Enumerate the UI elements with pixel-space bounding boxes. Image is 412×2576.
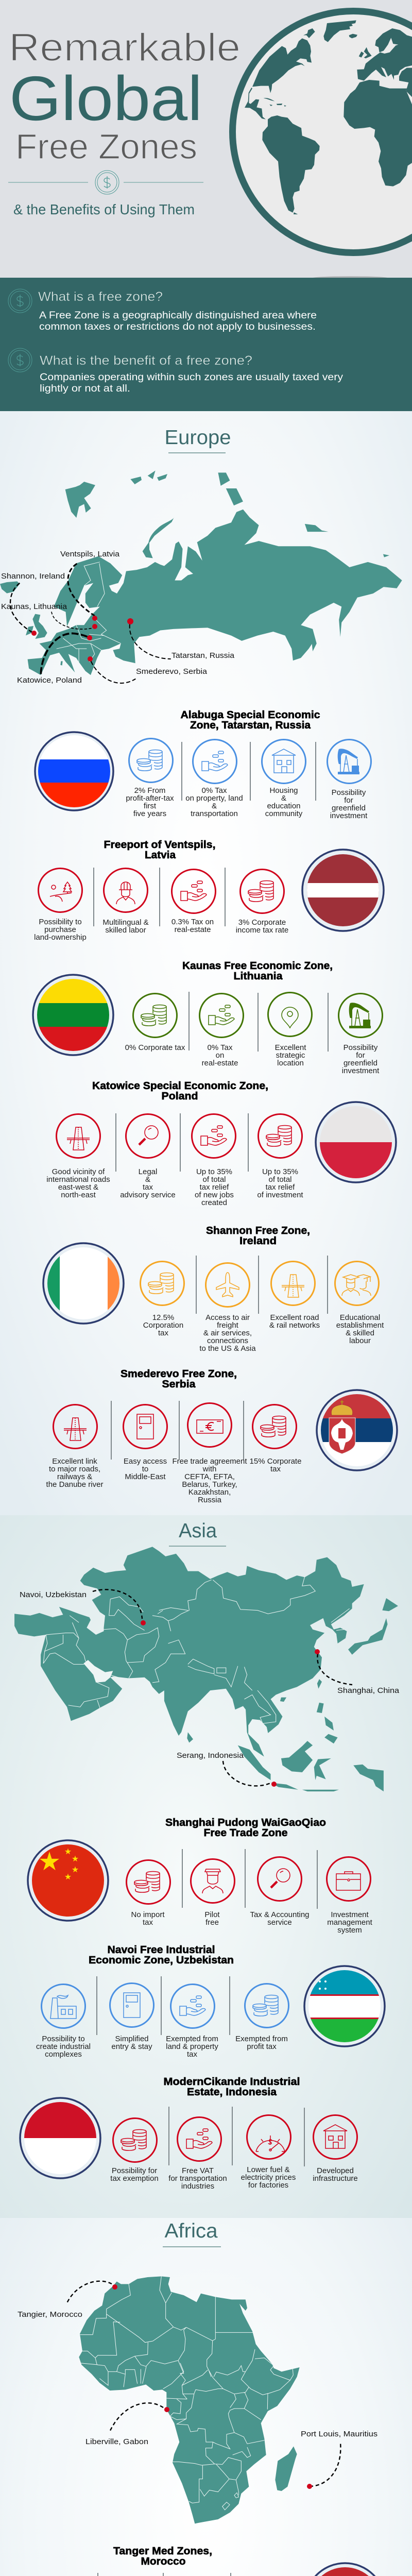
question two: What is the benefit of a free zone? bbox=[40, 353, 252, 368]
benefit: investment relief bbox=[257, 1114, 303, 1199]
benefit: greenfield: greenfield bbox=[344, 1059, 377, 1067]
benefit: tax exemption: Possibility for bbox=[112, 2166, 157, 2175]
answer two: Companies operating within such zones are usually taxed very bbox=[40, 371, 343, 383]
heading: Navoi Free Industrial bbox=[107, 1944, 215, 1956]
benefit: Middle-East access: Easy access bbox=[124, 1457, 167, 1466]
flag: Indonesia bbox=[20, 2098, 100, 2178]
heading: Shanghai Pudong WaiGaoQiao bbox=[165, 1817, 326, 1828]
heading bbox=[165, 1817, 326, 1839]
icon: dollar coin one bbox=[8, 289, 32, 313]
benefit: free VAT: industries bbox=[181, 2182, 214, 2191]
heading: Economic Zone, Uzbekistan bbox=[89, 1954, 234, 1966]
map markers bbox=[31, 616, 133, 662]
heading: Shannon Free Zone, bbox=[206, 1225, 310, 1236]
benefit: property tax: transportation bbox=[191, 809, 238, 818]
benefit: entry and stay: Simplified bbox=[115, 2035, 149, 2043]
zone: Shannon bbox=[43, 1225, 384, 1353]
map markers bbox=[112, 2284, 312, 2489]
benefit: infrastructure bbox=[313, 2115, 358, 2183]
benefit: infrastructure: Developed bbox=[317, 2166, 354, 2175]
benefit: trade agreements: with bbox=[202, 1465, 216, 1473]
flag: Russia bbox=[35, 732, 113, 810]
benefit: greenfield: Possibility bbox=[344, 1043, 377, 1052]
benefit: roads: north-east bbox=[61, 1191, 96, 1199]
benefit: corporate tax bbox=[236, 870, 288, 935]
benefit: transport link bbox=[46, 1404, 103, 1489]
map labels bbox=[1, 550, 235, 685]
benefit: corporate tax: income tax rate bbox=[236, 926, 288, 935]
benefit: investment relief: Up to 35% bbox=[262, 1167, 298, 1176]
panel: definitions bbox=[0, 278, 412, 411]
benefit: profit tax: first bbox=[144, 802, 157, 810]
heading: Estate, Indonesia bbox=[187, 2086, 277, 2098]
benefit: air freight: connections bbox=[207, 1336, 248, 1345]
benefit: Middle-East access: to bbox=[142, 1465, 148, 1473]
subtitle: & the Benefits of Using Them bbox=[13, 201, 195, 217]
benefit: profit tax bbox=[235, 1984, 288, 2051]
zone: Katowice bbox=[46, 1080, 396, 1207]
map labels: Ventspils, Latvia bbox=[60, 550, 120, 558]
benefit: air freight: Access to air bbox=[205, 1313, 250, 1322]
icon: dollar coin bbox=[95, 171, 119, 194]
benefit: corporate tax: tax bbox=[270, 1465, 281, 1473]
benefit: skilled labor: skilled labor bbox=[105, 926, 146, 935]
benefit: roads: east-west & bbox=[58, 1183, 98, 1192]
answer one: A Free Zone is a geographically distinguished area where bbox=[39, 310, 317, 321]
benefit: advisory: & bbox=[145, 1175, 150, 1184]
benefit: investment management: management bbox=[327, 1918, 373, 1927]
heading bbox=[89, 1944, 234, 1966]
benefit: housing: Housing bbox=[269, 786, 298, 795]
header panel bbox=[0, 0, 412, 280]
benefit: education bbox=[335, 1261, 384, 1345]
benefit: housing: community bbox=[265, 809, 303, 818]
benefit: housing: & bbox=[281, 794, 286, 803]
benefit: profit tax bbox=[126, 739, 174, 818]
benefit: jobs relief: of new jobs bbox=[195, 1191, 234, 1199]
map labels: Navoi, Uzbekistan bbox=[20, 1590, 87, 1599]
heading bbox=[180, 709, 320, 731]
benefit: air freight: to the US & Asia bbox=[199, 1344, 256, 1353]
benefit: Middle-East access bbox=[124, 1404, 167, 1481]
zone: Cikande bbox=[20, 2076, 358, 2191]
heading: Europe: Europe bbox=[165, 427, 231, 449]
benefit: real-estate tax bbox=[200, 993, 243, 1067]
benefit: greenfield: greenfield bbox=[332, 804, 366, 812]
map labels: Shanghai, China bbox=[337, 1686, 400, 1695]
title: Global bbox=[9, 63, 202, 133]
benefit: location: Excellent bbox=[275, 1043, 306, 1052]
zone: Kaunas bbox=[33, 960, 382, 1075]
heading: Zone, Tatarstan, Russia bbox=[190, 719, 311, 731]
map markers bbox=[141, 1620, 320, 1787]
heading: Free Trade Zone bbox=[204, 1827, 287, 1839]
benefit: import tax bbox=[127, 1860, 170, 1927]
benefit: accounting bbox=[250, 1857, 310, 1927]
benefit: entry and stay bbox=[110, 1984, 153, 2051]
benefit: profit tax: five years bbox=[133, 809, 166, 818]
benefit: profit tax: 2% From bbox=[134, 786, 165, 795]
benefit: property tax: tax bbox=[187, 2050, 198, 2059]
icon: dollar coin two bbox=[8, 348, 32, 372]
map labels: Liberville, Gabon bbox=[85, 2437, 148, 2446]
map routes bbox=[93, 1589, 352, 1786]
benefit: corporate tax: 0% Corporate tax bbox=[125, 1043, 185, 1052]
benefit: industrial complexes bbox=[36, 1985, 91, 2059]
flag: Uzbekistan bbox=[304, 1966, 385, 2046]
benefit: jobs relief bbox=[192, 1114, 236, 1207]
benefit: property tax bbox=[185, 740, 243, 818]
benefit: free VAT bbox=[168, 2117, 227, 2191]
map labels: Smederevo, Serbia bbox=[136, 667, 208, 676]
map labels: Tatarstan, Russia bbox=[171, 651, 235, 660]
zone: Ventspils bbox=[34, 839, 384, 942]
benefit: roads bbox=[46, 1114, 110, 1199]
question one: What is a free zone? bbox=[38, 290, 163, 304]
benefit: Middle-East access: Middle-East bbox=[125, 1472, 166, 1481]
benefit: location: strategic bbox=[276, 1051, 305, 1060]
benefit: jobs relief: created bbox=[201, 1198, 227, 1207]
benefit: greenfield: investment bbox=[330, 811, 368, 820]
benefit: land ownership: land-ownership bbox=[34, 933, 87, 942]
benefit: advisory: tax bbox=[143, 1183, 153, 1192]
heading bbox=[206, 1225, 310, 1247]
benefit: housing: education bbox=[267, 802, 301, 810]
title: Remarkable bbox=[9, 26, 241, 70]
benefit: greenfield: investment bbox=[342, 1066, 380, 1075]
benefit: corporation tax bbox=[140, 1261, 184, 1337]
heading: Serbia bbox=[162, 1378, 196, 1390]
heading: Latvia bbox=[145, 849, 176, 861]
benefit: road and rail: & rail networks bbox=[269, 1321, 320, 1330]
flag: Lithuania bbox=[33, 975, 113, 1055]
benefit: air freight: & air services, bbox=[203, 1329, 252, 1337]
benefit: greenfield bbox=[339, 993, 382, 1075]
benefit: import tax: tax bbox=[143, 1918, 153, 1927]
benefit: investment relief: of investment bbox=[257, 1191, 303, 1199]
heading: Alabuga Special Economic bbox=[180, 709, 320, 721]
panel: Africa bbox=[0, 2218, 412, 2576]
benefit: infrastructure: infrastructure bbox=[313, 2174, 358, 2183]
benefit: industrial complexes: Possibility to bbox=[42, 2035, 85, 2043]
map: Asia bbox=[14, 1547, 398, 1791]
heading bbox=[92, 1080, 268, 1102]
flag: China bbox=[28, 1840, 108, 1921]
heading: Lithuania bbox=[234, 970, 283, 982]
benefit: real-estate tax: 0% Tax bbox=[208, 1043, 232, 1052]
benefit: greenfield: for bbox=[356, 1051, 365, 1060]
icon: globe bbox=[233, 11, 412, 252]
title: Free Zones bbox=[15, 127, 197, 166]
map labels: Katowice, Poland bbox=[17, 676, 82, 685]
benefit: free VAT: Free VAT bbox=[182, 2166, 214, 2175]
benefit: land ownership bbox=[34, 869, 87, 942]
map labels bbox=[20, 1590, 400, 1760]
benefit: corporation tax: tax bbox=[158, 1329, 169, 1337]
benefit: fuel prices: for factories bbox=[248, 2181, 288, 2190]
benefit: corporate tax bbox=[250, 1404, 301, 1473]
benefit: real-estate tax: 0.3% Tax on bbox=[171, 918, 214, 926]
benefit: transport link: the Danube river bbox=[46, 1480, 103, 1489]
panel: Asia bbox=[0, 1515, 412, 2218]
benefit: education: & skilled bbox=[346, 1329, 374, 1337]
benefit: transport link: Excellent link bbox=[52, 1457, 97, 1466]
benefit: road and rail bbox=[269, 1261, 320, 1330]
flag: Ireland bbox=[43, 1243, 124, 1324]
flag: Poland bbox=[316, 1102, 396, 1182]
benefit: trade agreements: Free trade agreement bbox=[172, 1457, 247, 1466]
benefit: real-estate tax bbox=[171, 870, 215, 934]
zone: Smederevo bbox=[46, 1368, 397, 1504]
benefit: property tax: & bbox=[212, 802, 217, 810]
benefit: pilot free: Pilot bbox=[204, 1910, 220, 1919]
benefit: roads: Good vicinity of bbox=[52, 1167, 105, 1176]
benefit: real-estate tax: real-estate bbox=[175, 925, 211, 934]
benefit: education: Educational bbox=[340, 1313, 380, 1322]
benefit: pilot free: free bbox=[205, 1918, 219, 1927]
benefit: trade agreements: Kazakhstan, bbox=[188, 1488, 231, 1497]
benefit: pilot free bbox=[191, 1859, 235, 1927]
heading: Asia: Asia bbox=[179, 1520, 217, 1542]
benefit: roads: international roads bbox=[46, 1175, 110, 1184]
benefit: tax exemption: tax exemption bbox=[110, 2174, 159, 2183]
title bbox=[9, 26, 241, 166]
heading: Poland bbox=[162, 1090, 198, 1102]
flag: Serbia bbox=[317, 1390, 397, 1470]
benefit: industrial complexes: complexes bbox=[45, 2050, 82, 2059]
benefit: import tax: No import bbox=[131, 1910, 165, 1919]
benefit: fuel prices bbox=[241, 2115, 296, 2190]
heading: Tanger Med Zones, bbox=[113, 2545, 212, 2557]
benefit: land ownership: Possibility to bbox=[39, 918, 82, 926]
benefit: advisory: advisory service bbox=[120, 1191, 176, 1199]
benefit: tax exemption bbox=[110, 2119, 159, 2183]
flag: Latvia bbox=[302, 850, 384, 931]
benefit: skilled labor: Multilingual & bbox=[102, 918, 149, 927]
heading bbox=[104, 839, 215, 861]
benefit: investment relief: of total bbox=[268, 1175, 292, 1184]
benefit: greenfield: for bbox=[344, 796, 353, 805]
benefit: trade agreements: CEFTA, EFTA, bbox=[184, 1472, 235, 1481]
benefit: transport link: railways & bbox=[57, 1472, 92, 1481]
heading: Africa: Africa bbox=[165, 2220, 218, 2242]
map: Africa bbox=[79, 2276, 300, 2523]
benefit: fuel prices: Lower fuel & bbox=[247, 2165, 290, 2174]
benefit: fuel prices: electricity prices bbox=[241, 2173, 296, 2182]
zone: Tanger bbox=[97, 2546, 376, 2576]
benefit: trade agreements: Belarus, Turkey, bbox=[182, 1480, 237, 1489]
heading bbox=[121, 1368, 237, 1390]
heading: Kaunas Free Economic Zone, bbox=[182, 960, 333, 972]
heading: Katowice Special Economic Zone, bbox=[92, 1080, 268, 1092]
benefit: real-estate tax: real-estate bbox=[202, 1059, 238, 1067]
flag: Morocco bbox=[314, 2562, 376, 2576]
zone: Shanghai bbox=[28, 1817, 373, 1935]
map labels: Serang, Indonesia bbox=[177, 1751, 244, 1760]
benefit: housing bbox=[262, 740, 306, 818]
heading: Ireland bbox=[239, 1235, 277, 1247]
map labels: Shannon, Ireland bbox=[1, 572, 65, 581]
benefit: property tax bbox=[166, 1985, 218, 2059]
benefit: corporation tax: Corporation bbox=[143, 1321, 183, 1330]
benefit: corporate tax: 15% Corporate bbox=[250, 1457, 301, 1466]
benefit: property tax: Exempted from bbox=[166, 2035, 218, 2043]
heading: Freeport of Ventspils, bbox=[104, 839, 215, 851]
benefit: free VAT: for transportation bbox=[168, 2174, 227, 2183]
zone: Alabuga bbox=[35, 709, 371, 820]
benefit: investment management bbox=[327, 1857, 373, 1935]
benefit: investment management: Investment bbox=[331, 1910, 369, 1919]
panel: Europe bbox=[0, 411, 412, 1515]
map routes bbox=[67, 2281, 340, 2486]
map labels bbox=[18, 2310, 377, 2446]
benefit: trade agreements: Russia bbox=[198, 1496, 222, 1504]
benefit: location: location bbox=[277, 1059, 304, 1067]
benefit: education: establishment bbox=[336, 1321, 384, 1330]
benefit: real-estate tax: on bbox=[216, 1051, 224, 1060]
map: Europe and Russia bbox=[0, 470, 402, 675]
benefit: industrial complexes: create industrial bbox=[36, 2042, 91, 2051]
map routes bbox=[10, 564, 171, 683]
benefit: profit tax: Exempted from bbox=[235, 2035, 288, 2043]
benefit: profit tax: profit tax bbox=[247, 2042, 277, 2051]
heading bbox=[164, 2076, 300, 2098]
benefit: air freight: freight bbox=[217, 1321, 239, 1330]
benefit: greenfield bbox=[328, 740, 371, 820]
benefit: corporation tax: 12.5% bbox=[152, 1313, 174, 1322]
benefit: corporate tax: 3% Corporate bbox=[238, 918, 286, 927]
heading: Morocco bbox=[141, 2555, 185, 2567]
benefit: jobs relief: of total bbox=[202, 1175, 226, 1184]
heading bbox=[113, 2545, 212, 2567]
benefit: accounting: service bbox=[267, 1918, 292, 1927]
benefit: road and rail: Excellent road bbox=[270, 1313, 319, 1322]
benefit: investment relief: tax relief bbox=[266, 1183, 295, 1192]
benefit: location bbox=[268, 992, 312, 1067]
benefit: investment management: system bbox=[337, 1926, 362, 1935]
zone: Navoi bbox=[36, 1944, 385, 2059]
benefit: jobs relief: Up to 35% bbox=[196, 1167, 232, 1176]
benefit: trade agreements bbox=[172, 1403, 247, 1504]
benefit: advisory bbox=[120, 1114, 176, 1199]
benefit: skilled labor bbox=[102, 869, 149, 935]
answer two: lightly or not at all. bbox=[40, 383, 130, 394]
heading bbox=[182, 960, 333, 982]
map labels: Port Louis, Mauritius bbox=[301, 2430, 377, 2438]
benefit: profit tax: profit-after-tax bbox=[126, 794, 174, 803]
benefit: air freight bbox=[199, 1263, 256, 1353]
benefit: greenfield: Possibility bbox=[332, 788, 366, 797]
benefit: accounting: Tax & Accounting bbox=[250, 1910, 310, 1919]
benefit: entry and stay: entry & stay bbox=[111, 2042, 152, 2051]
heading: Smederevo Free Zone, bbox=[121, 1368, 237, 1380]
benefit: corporate tax bbox=[125, 993, 185, 1052]
map labels: Kaunas, Lithuania bbox=[1, 602, 67, 611]
benefit: education: labour bbox=[349, 1336, 371, 1345]
benefit: transport link: to major roads, bbox=[49, 1465, 100, 1473]
benefit: property tax: 0% Tax bbox=[202, 786, 227, 795]
answer one: common taxes or restrictions do not apply to businesses. bbox=[39, 321, 316, 332]
benefit: property tax: on property, land bbox=[185, 794, 243, 803]
heading: ModernCikande Industrial bbox=[164, 2076, 300, 2088]
benefit: property tax: land & property bbox=[166, 2042, 218, 2051]
benefit: land ownership: purchase bbox=[44, 925, 76, 934]
benefit: jobs relief: tax relief bbox=[200, 1183, 229, 1192]
benefit: advisory: Legal bbox=[139, 1167, 157, 1176]
map labels: Tangier, Morocco bbox=[18, 2310, 82, 2319]
